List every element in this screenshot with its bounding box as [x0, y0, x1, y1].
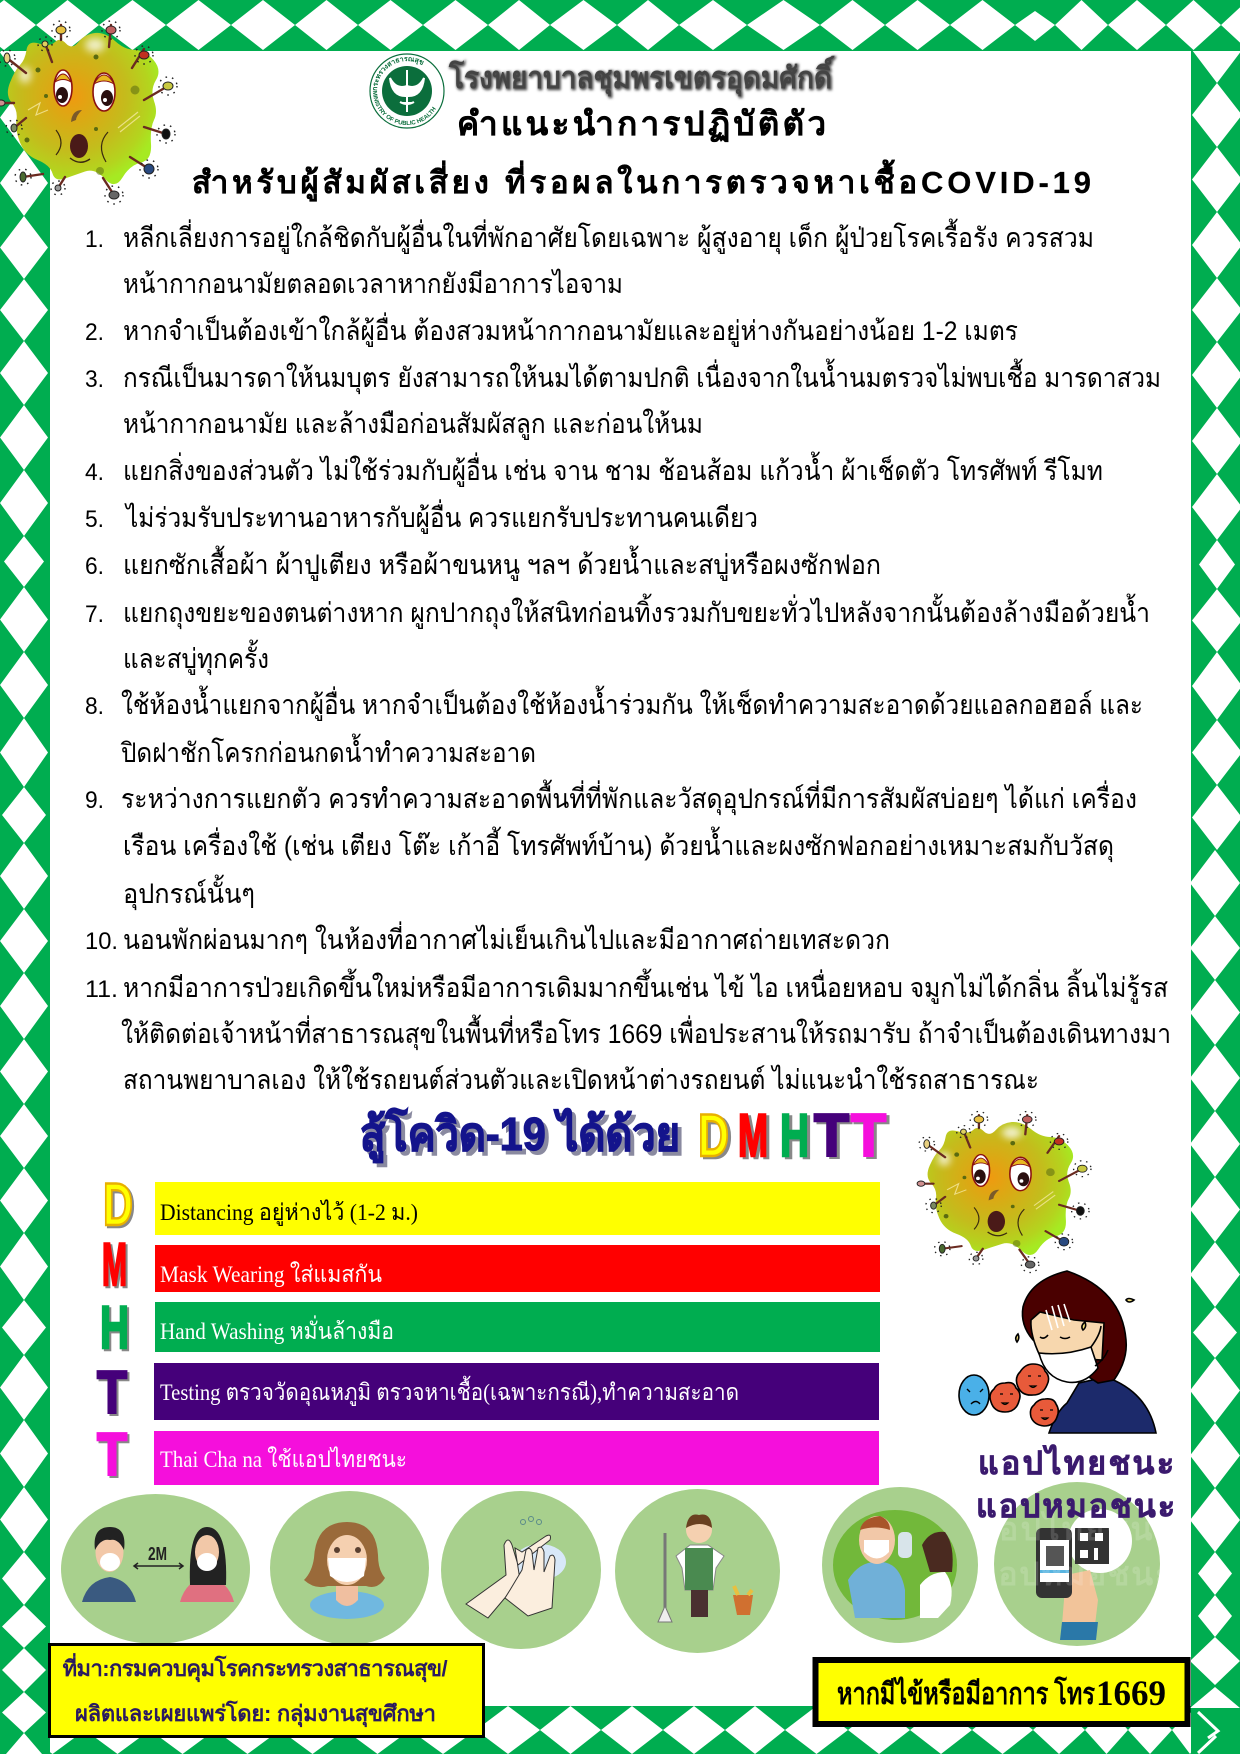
icon circle: distancing 2M: 2M: [148, 1544, 167, 1564]
numbered instruction list: 9.: [85, 787, 104, 814]
heading: hospital name: โรงพยาบาลชุมพรเขตรอุดมศักดิ์: [448, 55, 835, 97]
callout: hotline 1669: หากมีไข้หรือมีอาการ โทร: [837, 1675, 1095, 1711]
numbered instruction list: อุปกรณ์นั้นๆ: [123, 874, 255, 911]
numbered instruction list: [85, 218, 1171, 1095]
numbered instruction list: 7.: [85, 601, 104, 628]
heading: fight COVID-19 with DMHTT: [360, 1102, 889, 1171]
heading: fight COVID-19 with DMHTT: T: [814, 1102, 849, 1169]
numbered instruction list: 4.: [85, 459, 104, 486]
heading: fight COVID-19 with DMHTT: H: [783, 1104, 812, 1171]
bar: thai chana: [154, 1431, 879, 1485]
icon circle: temperature check: [822, 1487, 978, 1643]
letter T testing: T: [97, 1359, 127, 1426]
bar: testing: [154, 1363, 879, 1420]
icon circle: hand washing: [441, 1491, 601, 1649]
numbered instruction list: 1.: [85, 226, 104, 253]
numbered instruction list: 8.: [85, 693, 104, 720]
numbered instruction list: 3.: [85, 366, 104, 393]
heading: hospital name: โรงพยาบาลชุมพรเขตรอุดมศักดิ์: [449, 56, 836, 98]
numbered instruction list: สถานพยาบาลเอง ให้ใช้รถยนต์ส่วนตัวและเปิดหน้าต่างรถยนต์ ไม่แนะนำใช้รถสาธารณะ: [123, 1064, 1039, 1095]
logo: ministry of public health: กระทรวงสาธารณสุข: [373, 57, 424, 91]
letter H: H: [100, 1294, 129, 1361]
numbered instruction list: ใช้ห้องน้ำแยกจากผู้อื่น หากจำเป็นต้องใช้ห้องน้ำร่วมกัน ให้เช็ดทำความสะอาดด้วยแอลกอฮอล์ และ: [121, 685, 1143, 721]
numbered instruction list: 2.: [85, 319, 104, 346]
callout: source credit: ผลิตและเผยแพร่โดย: กลุ่มงานสุขศึกษา: [75, 1700, 436, 1728]
bar: thai chana: Thai Cha na ใช้แอปไทยชนะ: [160, 1446, 407, 1472]
heading: fight COVID-19 with DMHTT: T: [854, 1104, 889, 1171]
letter T thai chana: T: [97, 1421, 127, 1488]
bar: distancing: [155, 1182, 880, 1235]
icon: virus mascot top left: [0, 21, 177, 204]
letter T thai chana: T: [99, 1423, 129, 1490]
app name: Mor Chana: แอปหมอชนะ: [976, 1488, 1175, 1524]
bar: mask wearing: Mask Wearing ใส่แมสกัน: [160, 1261, 382, 1287]
heading: fight COVID-19 with DMHTT: สู้โควิด-19 ได้ด้วย: [364, 1111, 684, 1167]
numbered instruction list: 6.: [85, 553, 104, 580]
numbered instruction list: 10.: [85, 928, 118, 955]
heading: fight COVID-19 with DMHTT: M: [738, 1102, 768, 1169]
heading: fight COVID-19 with DMHTT: T: [851, 1102, 886, 1169]
numbered instruction list: นอนพักผ่อนมากๆ ในห้องที่อากาศไม่เย็นเกินไปและมีอากาศถ่ายเทสะดวก: [123, 921, 890, 955]
numbered instruction list: หน้ากากอนามัย และล้างมือก่อนสัมผัสลูก และก่อนให้นม: [123, 408, 703, 440]
numbered instruction list: หากมีอาการป่วยเกิดขึ้นใหม่หรือมีอาการเดิมมากขึ้นเช่น ไข้ ไอ เหนื่อยหอบ จมูกไม่ได้กลิ่น ลิ้นไม่รู้รส: [123, 968, 1168, 1004]
heading: instructions title line 2: สำหรับผู้สัมผัสเสี่ยง ที่รอผลในการตรวจหาเชื้อCOVID-19: [192, 159, 1091, 202]
callout: source credit: ที่มา:กรมควบคุมโรคกระทรวงสาธารณสุข/: [63, 1652, 448, 1683]
logo: ministry of public health: [369, 53, 445, 129]
app name: Thai Chana: แอปไทยชนะ: [978, 1444, 1174, 1481]
numbered instruction list: แยกถุงขยะของตนต่างหาก ผูกปากถุงให้สนิทก่อนทิ้งรวมกับขยะทั่วไปหลังจากนั้นต้องล้างมือด้วยน้ำ: [123, 593, 1150, 630]
numbered instruction list: แยกสิ่งของส่วนตัว ไม่ใช้ร่วมกับผู้อื่น เช่น จาน ชาม ช้อนส้อม แก้วน้ำ ผ้าเช็ดตัว โทรศัพท์ รีโมท: [123, 451, 1103, 487]
bar: distancing: Distancing อยู่ห่างไว้ (1-2 ม.): [160, 1199, 418, 1226]
numbered instruction list: หน้ากากอนามัยตลอดเวลาหากยังมีอาการไอจาม: [123, 269, 623, 299]
bar: testing: Testing ตรวจวัดอุณหภูมิ ตรวจหาเชื้อ(เฉพาะกรณี),ทำความสะอาด: [160, 1376, 739, 1406]
numbered instruction list: เรือน เครื่องใช้ (เช่น เตียง โต๊ะ เก้าอี้ โทรศัพท์บ้าน) ด้วยน้ำและผงซักฟอกอย่างเหมาะสมกับวัสดุ: [123, 826, 1114, 863]
bar: mask wearing: [155, 1245, 880, 1292]
callout: hotline 1669: 1669: [1096, 1673, 1166, 1713]
bar: hand washing: [155, 1302, 880, 1352]
heading: fight COVID-19 with DMHTT: สู้โควิด-19 ได้ด้วย: [360, 1107, 680, 1163]
numbered instruction list: 11.: [85, 976, 118, 1003]
letter T testing: T: [99, 1361, 129, 1428]
bar: hand washing: Hand Washing หมั่นล้างมือ: [160, 1315, 394, 1344]
letter M: M: [102, 1231, 127, 1298]
icon circle: distancing 2M: [61, 1494, 250, 1644]
numbered instruction list: ไม่ร่วมรับประทานอาหารกับผู้อื่น ควรแยกรับประทานคนเดียว: [124, 499, 758, 534]
icon: virus mascot right: [917, 1111, 1091, 1273]
logo: ministry of public health: MINISTRY OF PUBLIC HEALTH: [372, 91, 436, 125]
callout: hotline 1669: [816, 1660, 1188, 1724]
heading: fight COVID-19 with DMHTT: H: [780, 1102, 809, 1169]
letter M: M: [104, 1233, 129, 1300]
icon circle: cleaning: [615, 1489, 780, 1653]
icon: masked woman coughing with germs: [959, 1271, 1156, 1433]
numbered instruction list: 5.: [85, 506, 104, 533]
icon circle: face mask: [270, 1491, 429, 1645]
icon circle: QR check-in with app text: แอปหมอชนะ: [976, 1556, 1172, 1592]
icon circle: QR check-in with app text: แอปไทยชนะ: [976, 1510, 1172, 1547]
heading: fight COVID-19 with DMHTT: T: [817, 1104, 852, 1171]
heading: instructions title line 1: คำแนะนำการปฏิบัติตัว: [457, 105, 826, 142]
numbered instruction list: หลีกเลี่ยงการอยู่ใกล้ชิดกับผู้อื่นในที่พักอาศัยโดยเฉพาะ ผู้สูงอายุ เด็ก ผู้ป่วยโรคเรื้อรัง ควรสวม: [123, 218, 1094, 255]
heading: fight COVID-19 with DMHTT: D: [701, 1104, 732, 1171]
numbered instruction list: ปิดฝาชักโครกก่อนกดน้ำทำความสะอาด: [121, 733, 536, 768]
letter H: H: [102, 1296, 131, 1363]
numbered instruction list: และสบู่ทุกครั้ง: [123, 639, 269, 676]
callout: source credit: [50, 1644, 484, 1736]
numbered instruction list: ระหว่างการแยกตัว ควรทำความสะอาดพื้นที่ที่พักและวัสดุอุปกรณ์ที่มีการสัมผัสบ่อยๆ ได้แก่ เครื่อง: [121, 779, 1137, 816]
icon circle: QR check-in with app text: [976, 1482, 1172, 1646]
letter D: D: [103, 1171, 133, 1238]
numbered instruction list: แยกซักเสื้อผ้า ผ้าปูเตียง หรือผ้าขนหนู ฯลฯ ด้วยน้ำและสบู่หรือผงซักฟอก: [123, 545, 881, 581]
heading: fight COVID-19 with DMHTT: D: [698, 1102, 729, 1169]
numbered instruction list: หากจำเป็นต้องเข้าใกล้ผู้อื่น ต้องสวมหน้ากากอนามัยและอยู่ห่างกันอย่างน้อย 1-2 เมตร: [123, 312, 1018, 347]
letter D: D: [105, 1173, 135, 1240]
letter M: [102, 1231, 129, 1300]
heading: fight COVID-19 with DMHTT: M: [741, 1104, 771, 1171]
